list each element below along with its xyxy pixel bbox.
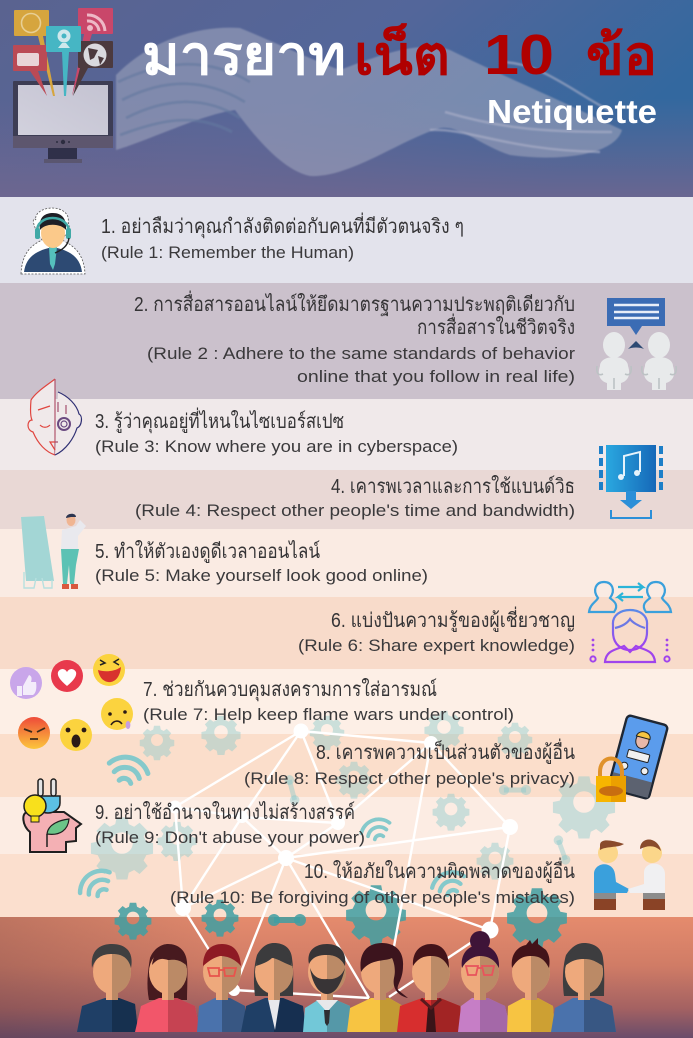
text: rule 3: 3. รู้ว่าคุณอยู่ที่ไหนในไซเบอร์สเปซ <box>95 407 344 434</box>
subtitle: Netiquette: Netiquette <box>487 93 657 130</box>
person 10 <box>551 943 616 1032</box>
person 5 <box>303 944 350 1032</box>
text: rule 6: (Rule 6: Share expert knowledge) <box>298 636 575 655</box>
text: rule 1: 1. อย่าลืมว่าคุณกำลังติดต่อกับคนที่มีตัวตนจริง ๆ <box>101 212 464 239</box>
text: rule 2: (Rule 2 : Adhere to the same standards of behavior <box>147 344 575 363</box>
text: rule 10 <box>170 857 575 907</box>
text: rule 4: (Rule 4: Respect other people's time and bandwidth) <box>135 501 575 520</box>
icon: emoji reactions <box>10 654 133 751</box>
text: rule 9 <box>95 801 365 847</box>
rule 5 <box>21 514 428 589</box>
text: rule 6: 6. แบ่งปันความรู้ของผู้เชี่ยวชาญ <box>331 606 575 633</box>
text: rule 3: (Rule 3: Know where you are in cyberspace) <box>95 437 458 456</box>
icon: knowledge exchange <box>589 582 671 662</box>
title: Thai heading: 10 <box>484 23 554 87</box>
title: Thai heading: มารยาท <box>142 26 346 86</box>
icon: bulb, plug and leaf <box>23 779 81 852</box>
icon: two people talking <box>597 298 676 390</box>
network lines <box>175 731 510 998</box>
header panel <box>0 0 693 197</box>
text: rule 10: 10. ให้อภัยในความผิดพลาดของผู้อื่น <box>304 857 575 884</box>
text: rule 9: 9. อย่าใช้อำนาจในทางไม่สร้างสรรค์ <box>95 801 355 824</box>
text: rule 4 <box>135 475 575 520</box>
text: rule 8: (Rule 8: Respect other people's privacy) <box>244 769 575 788</box>
rule 4 <box>135 445 663 520</box>
icon: person at mirror <box>21 514 86 589</box>
rule 9 <box>23 779 365 852</box>
icon: monitor with social bubbles <box>13 8 113 163</box>
person 2 <box>135 944 200 1032</box>
text: rule 2: 2. การสื่อสารออนไลน์ให้ยึดมาตรฐานความประพฤติเดียวกับ <box>134 290 575 316</box>
rule 8 <box>244 715 668 802</box>
text: rule 8: 8. เคารพความเป็นส่วนตัวของผู้อื่น <box>316 738 575 765</box>
person 3 <box>197 944 245 1032</box>
text: rule 2: online that you follow in real life) <box>297 367 575 386</box>
text: rule 2 <box>134 290 575 386</box>
text: rule 2: การสื่อสารในชีวิตจริง <box>417 313 575 339</box>
rule 3 <box>28 379 458 456</box>
title: Thai heading: ข้อ <box>586 26 657 86</box>
network nodes <box>168 724 518 996</box>
person 4 <box>241 943 306 1032</box>
text: rule 5: (Rule 5: Make yourself look good online) <box>95 566 428 585</box>
text: rule 3 <box>95 407 458 456</box>
icon: headset agent <box>21 208 85 274</box>
icon: human robot face <box>28 379 81 455</box>
rule 2 <box>134 290 676 390</box>
icon: handshake <box>594 839 665 910</box>
title: Thai heading <box>142 23 657 87</box>
text: rule 6 <box>298 606 575 655</box>
text: rule 1 <box>101 212 464 262</box>
background network illustration <box>75 711 615 998</box>
person 7 <box>397 944 462 1032</box>
person 8 <box>458 931 511 1032</box>
rule 6 <box>298 582 671 662</box>
text: rule 9: (Rule 9: Don't abuse your power) <box>95 828 365 847</box>
text: rule 5 <box>95 540 428 585</box>
text: rule 10: (Rule 10: Be forgiving of other people's mistakes) <box>170 888 575 907</box>
text: rule 5: 5. ทำให้ตัวเองดูดีเวลาออนไลน์ <box>95 540 320 564</box>
person 1 <box>77 944 138 1032</box>
text: rule 8 <box>244 738 575 788</box>
text: rule 7 <box>143 678 514 724</box>
text: rule 4: 4. เคารพเวลาและการใช้แบนด์วิธ <box>331 475 575 498</box>
brush stroke <box>116 28 622 176</box>
group of ten people <box>77 931 616 1032</box>
person 9 <box>507 938 555 1032</box>
rule 10 <box>170 839 665 910</box>
rule 7 <box>10 654 514 751</box>
text: rule 1: (Rule 1: Remember the Human) <box>101 243 354 262</box>
icon: media download <box>599 445 663 518</box>
rule 1 <box>21 208 464 274</box>
person 6 <box>347 943 408 1032</box>
text: rule 7: 7. ช่วยกันควบคุมสงครามการใส่อารมณ์ <box>143 678 437 702</box>
title: Thai heading: เน็ต <box>354 24 450 86</box>
text: rule 7: (Rule 7: Help keep flame wars under control) <box>143 705 514 724</box>
icon: phone and padlock <box>596 715 668 802</box>
gears <box>75 711 615 903</box>
